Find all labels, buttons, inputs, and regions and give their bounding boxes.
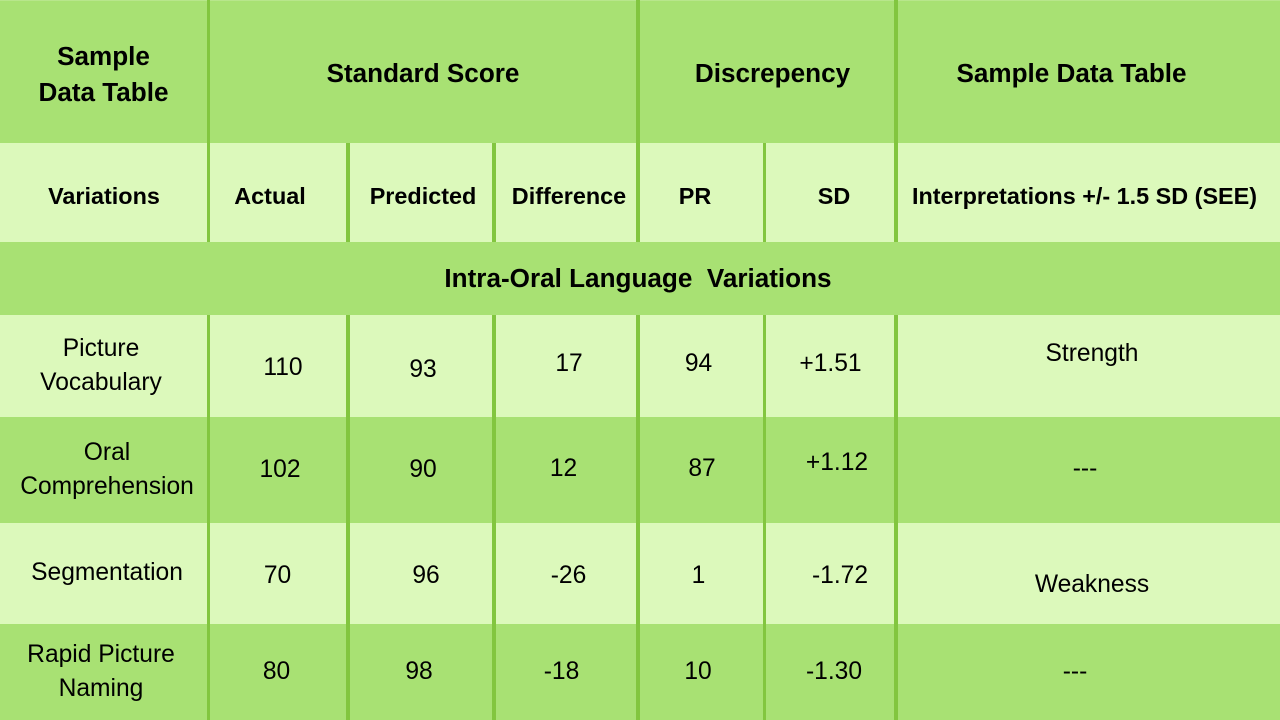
row label: Oral Comprehension: Comprehension: [20, 473, 194, 500]
row label: Picture Vocabulary: Picture: [63, 335, 139, 362]
value: Rapid Picture Naming interpretation: ---: [1063, 658, 1087, 685]
heading: Discrepency: Discrepency: [695, 58, 850, 88]
value: Picture Vocabulary SD: +1.51: [799, 350, 862, 377]
row label: Oral Comprehension: Oral: [84, 439, 130, 466]
value: Picture Vocabulary interpretation: Strength: [1046, 340, 1138, 367]
row label: Picture Vocabulary: [40, 335, 162, 396]
panel: sub-header row background: [0, 143, 1280, 242]
row label: Segmentation: Segmentation: [31, 559, 183, 586]
value: Rapid Picture Naming actual: 80: [263, 658, 290, 685]
panel: header row background: [0, 0, 1280, 143]
value: Oral Comprehension actual: 102: [259, 456, 301, 483]
column label: PR: PR: [679, 183, 711, 209]
value: Oral Comprehension predicted: 90: [409, 456, 437, 483]
value: Rapid Picture Naming SD: -1.30: [806, 658, 862, 685]
panel: row Picture Vocabulary background: [0, 315, 1280, 417]
value: Segmentation PR: 1: [692, 562, 705, 589]
column label: Difference: Difference: [512, 183, 626, 209]
row label: Rapid Picture Naming: Rapid Picture: [27, 641, 175, 668]
heading: Sample Data Table: Sample Data Table: [956, 58, 1187, 88]
value: Segmentation interpretation: Weakness: [1035, 571, 1149, 598]
column label: SD: SD: [818, 183, 850, 209]
value: Segmentation predicted: 96: [412, 562, 440, 589]
section heading: Intra-Oral Language Variations: Intra-Oral Language Variations: [444, 263, 832, 293]
panel: row Segmentation background: [0, 523, 1280, 624]
value: Oral Comprehension PR: 87: [688, 455, 716, 482]
value: Oral Comprehension difference: 12: [550, 455, 577, 482]
value: Picture Vocabulary predicted: 93: [409, 356, 437, 383]
heading: Sample Data Table column: [38, 41, 169, 107]
value: Rapid Picture Naming PR: 10: [684, 658, 712, 685]
value: Picture Vocabulary PR: 94: [685, 350, 712, 377]
row label: Rapid Picture Naming: Naming: [59, 675, 143, 702]
column label: Variations: Variations: [48, 183, 160, 209]
value: Oral Comprehension SD: +1.12: [806, 449, 868, 476]
row label: Oral Comprehension: [20, 439, 194, 500]
value: Rapid Picture Naming difference: -18: [544, 658, 579, 685]
heading: Sample Data Table column: Sample: [57, 41, 150, 71]
row label: Picture Vocabulary: Vocabulary: [40, 369, 162, 396]
panel: row Rapid Picture Naming background: [0, 624, 1280, 720]
column label: Actual: Actual: [234, 183, 306, 209]
heading: Standard Score: Standard Score: [327, 58, 519, 88]
panel: section band background: [0, 242, 1280, 315]
column label: Interpretations: Interpretations +/- 1.5 SD (SEE): [912, 183, 1257, 209]
value: Picture Vocabulary difference: 17: [555, 350, 583, 377]
column label: Predicted: Predicted: [370, 183, 476, 209]
value: Picture Vocabulary actual: 110: [263, 354, 303, 381]
value: Segmentation actual: 70: [264, 562, 291, 589]
value: Segmentation difference: -26: [551, 562, 586, 589]
value: Rapid Picture Naming predicted: 98: [405, 658, 433, 685]
row label: Rapid Picture Naming: [27, 641, 175, 702]
panel: row Oral Comprehension background: [0, 417, 1280, 523]
value: Oral Comprehension interpretation: ---: [1073, 455, 1097, 482]
heading: Sample Data Table column: Data Table: [38, 77, 169, 107]
value: Segmentation SD: -1.72: [812, 562, 868, 589]
